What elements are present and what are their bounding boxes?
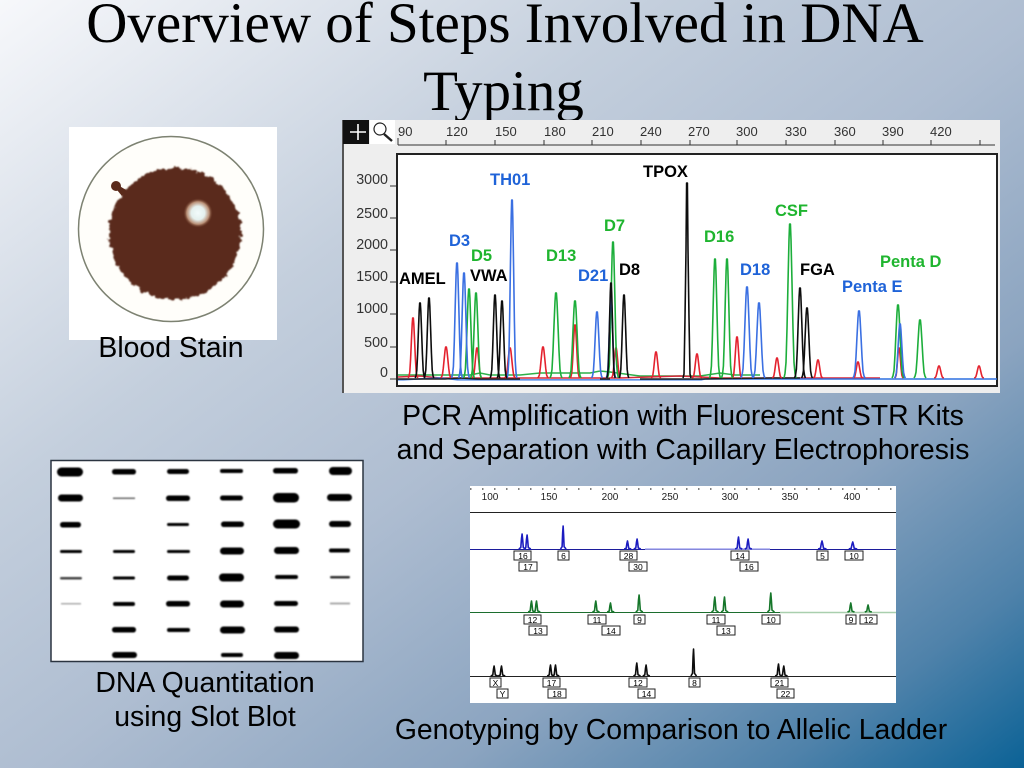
blue allele numbers: 10 <box>849 551 859 561</box>
slot blot bands <box>57 467 352 659</box>
black allele numbers: 14 <box>642 689 651 699</box>
size ruler: 250 <box>662 492 679 503</box>
panel: blood stain photo <box>69 127 277 340</box>
plot area <box>397 154 997 386</box>
locus labels: Penta E <box>842 278 903 296</box>
top size ruler: 90 <box>398 124 412 139</box>
black allele numbers: X <box>493 678 499 688</box>
green allele numbers: 14 <box>606 626 616 636</box>
top size ruler: 390 <box>882 124 904 139</box>
locus labels: D7 <box>604 217 625 235</box>
black allele numbers: 18 <box>552 689 562 699</box>
y axis labels: 1500 <box>356 269 388 285</box>
panel: slot blot <box>51 460 363 662</box>
locus labels <box>399 163 942 296</box>
red peaks <box>408 318 984 378</box>
y axis labels: 2000 <box>356 237 388 253</box>
blue trace <box>470 526 896 550</box>
top size ruler: 210 <box>592 124 614 139</box>
y axis labels: 3000 <box>356 172 388 188</box>
locus labels: D3 <box>449 232 470 250</box>
caption: DNA quantitation: DNA Quantitation <box>95 667 315 699</box>
top size ruler: 420 <box>930 124 952 139</box>
green allele numbers <box>528 615 873 636</box>
black allele numbers: 12 <box>633 678 643 688</box>
blue allele tags <box>514 551 863 571</box>
locus labels: D13 <box>546 247 576 265</box>
title <box>86 0 924 123</box>
blood stain <box>109 168 241 300</box>
green allele tags <box>524 615 877 635</box>
filter paper circle <box>78 136 264 322</box>
caption: DNA quantitation: using Slot Blot <box>114 701 296 733</box>
y axis labels: 2500 <box>356 206 388 222</box>
y axis labels: 500 <box>364 335 388 351</box>
caption: PCR amplification <box>397 400 969 466</box>
stain droplet <box>111 181 126 196</box>
size ruler: 350 <box>782 492 799 503</box>
green allele numbers: 10 <box>766 615 776 625</box>
black allele numbers: 8 <box>692 678 697 688</box>
icon: magnifier <box>370 120 395 144</box>
blue allele numbers <box>518 551 859 572</box>
blue allele numbers: 5 <box>820 551 825 561</box>
locus labels: D5 <box>471 247 492 265</box>
icon: zoom plus <box>343 120 369 144</box>
locus labels: D8 <box>619 261 640 279</box>
blue allele numbers: 16 <box>518 551 528 561</box>
black allele tags <box>490 678 794 698</box>
baselines <box>398 371 997 380</box>
green allele numbers: 12 <box>864 615 873 625</box>
size ruler: 400 <box>844 492 861 503</box>
black allele numbers <box>493 678 790 699</box>
caption: PCR amplification: and Separation with Capillary Electrophoresis <box>397 434 969 466</box>
top size ruler: 120 <box>446 124 468 139</box>
black allele numbers: 17 <box>547 678 556 688</box>
y axis labels: 0 <box>380 365 388 381</box>
green allele numbers: 11 <box>712 615 721 625</box>
locus labels: AMEL <box>399 270 446 288</box>
locus labels: D18 <box>740 261 770 279</box>
top size ruler: 300 <box>736 124 758 139</box>
blue peaks <box>452 200 905 378</box>
blue allele numbers: 30 <box>633 562 643 572</box>
top size ruler: 270 <box>688 124 710 139</box>
blue allele numbers: 17 <box>523 562 533 572</box>
top size ruler: 240 <box>640 124 662 139</box>
top size ruler: 150 <box>495 124 517 139</box>
green allele numbers: 9 <box>849 615 854 625</box>
size ruler: 150 <box>541 492 558 503</box>
green allele numbers: 13 <box>533 626 543 636</box>
blue allele numbers: 16 <box>744 562 754 572</box>
caption: genotyping: Genotyping by Comparison to Allelic Ladder <box>395 714 947 746</box>
size ruler: 300 <box>722 492 739 503</box>
y axis labels: 1000 <box>356 301 388 317</box>
stain highlight <box>183 198 213 228</box>
locus labels: TH01 <box>490 171 530 189</box>
locus labels: VWA <box>470 267 508 285</box>
locus labels: D21 <box>578 267 608 285</box>
locus labels: FGA <box>800 261 835 279</box>
black allele numbers: Y <box>500 689 506 699</box>
blue allele numbers: 14 <box>735 551 745 561</box>
size ruler <box>470 489 896 512</box>
panel: electropherogram chart <box>342 120 1000 393</box>
caption: blood stain: Blood Stain <box>98 332 244 364</box>
locus labels: TPOX <box>643 163 688 181</box>
black allele numbers: 22 <box>781 689 790 699</box>
caption: PCR amplification: PCR Amplification with Fluorescent STR Kits <box>402 400 964 432</box>
y axis labels <box>356 172 396 381</box>
green allele numbers: 12 <box>528 615 537 625</box>
locus labels: CSF <box>775 202 808 220</box>
caption: DNA quantitation <box>95 667 315 733</box>
top size ruler: 180 <box>544 124 566 139</box>
green allele numbers: 13 <box>721 626 731 636</box>
blue allele numbers: 6 <box>561 551 566 561</box>
size ruler: 200 <box>602 492 619 503</box>
size ruler: 100 <box>482 492 499 503</box>
locus labels: Penta D <box>880 253 942 271</box>
panel: allelic ladder genotyping <box>470 486 896 703</box>
green allele numbers: 11 <box>593 615 602 625</box>
black trace <box>470 649 896 676</box>
black allele numbers: 21 <box>775 678 784 688</box>
green trace <box>470 593 896 612</box>
top size ruler: 360 <box>834 124 856 139</box>
green peaks <box>464 224 926 378</box>
black peaks <box>415 183 812 378</box>
locus labels: D16 <box>704 228 734 246</box>
top size ruler: 330 <box>785 124 807 139</box>
blue allele numbers: 28 <box>624 551 633 561</box>
title: Typing <box>423 60 584 123</box>
top size ruler <box>398 124 995 145</box>
green allele numbers: 9 <box>637 615 642 625</box>
